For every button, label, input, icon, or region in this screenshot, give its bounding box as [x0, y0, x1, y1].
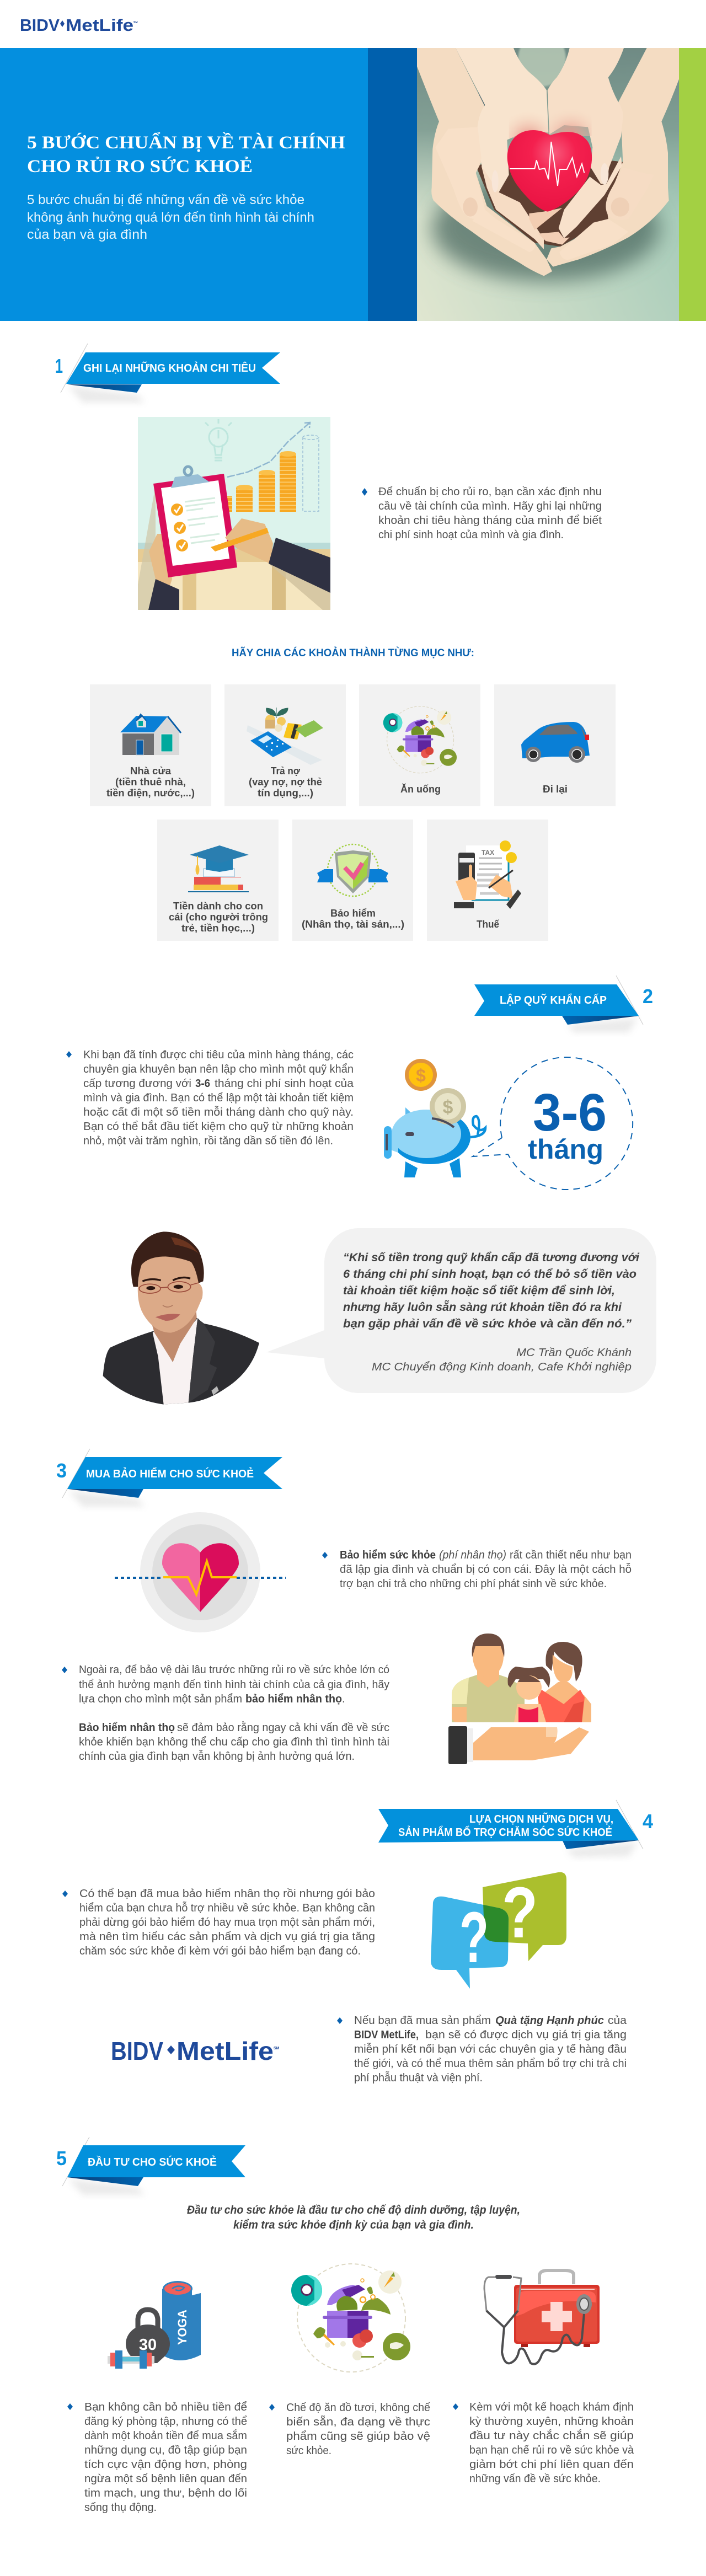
logo: BIDV MetLife large: SM — [274, 2047, 280, 2050]
text block: gym advice: những dụng cụ, đồ tập giúp bạn — [84, 2444, 247, 2456]
text block: step 1 description: khoản chi tiêu hàng tháng của mình để biết — [378, 515, 602, 527]
text block: life insurance: sẽ đảm bảo rằng ngay cả khi vấn đề về sức — [177, 1721, 389, 1734]
text block: step 5 intro — [187, 2204, 520, 2231]
text block: step 1 description: chi phí sinh hoạt của mình và gia đình. — [378, 529, 564, 541]
icon: yoga mat, kettlebell and dumbbell: 30 — [139, 2336, 157, 2354]
icon: shield — [317, 844, 388, 896]
panel: card debt: Trả nợ — [271, 765, 300, 776]
panel: card children — [157, 820, 279, 941]
callout: quote bubble: MC Chuyển động Kinh doanh, Cafe Khởi nghiệp — [372, 1361, 632, 1373]
callout: 3-6 months dashed bubble — [473, 1057, 633, 1190]
image: portrait of MC Trần Quốc Khánh — [103, 1231, 259, 1405]
panel: card transport: Đi lại — [543, 784, 568, 795]
callout: quote bubble: “Khi số tiền trong quỹ khẩn cấp đã tương đương với — [343, 1251, 640, 1264]
heading: hero title: CHO RỦI RO SỨC KHOẺ — [27, 156, 253, 176]
text block: step 4 second paragraph: bạn sẽ có được dịch vụ giá trị gia tăng — [425, 2029, 627, 2041]
illustration: clipboard and coin stacks — [138, 417, 330, 610]
icon: yoga mat, kettlebell and dumbbell: YOGA — [175, 2310, 189, 2345]
panel: card children: Tiền dành cho con — [173, 901, 263, 912]
panel: hero banner — [0, 31, 706, 321]
text block: diet advice: sức khỏe. — [286, 2445, 331, 2457]
text block: check-up advice: những vấn đề về sức khỏe. — [469, 2473, 601, 2485]
text block: life insurance: Bảo hiểm nhân thọ — [79, 1722, 175, 1734]
text block: diet advice: biến sẵn, đa dạng về thực — [286, 2416, 430, 2428]
panel: card insurance: Bảo hiểm — [330, 908, 376, 919]
text block: diet advice: phẩm cũng sẽ giúp bảo vệ — [286, 2430, 430, 2443]
text block: health insurance: rất cần thiết nếu như bạn — [510, 1549, 632, 1561]
text block: life insurance: bảo hiểm nhân thọ — [245, 1693, 342, 1705]
text block: gym advice: sống thụ động. — [84, 2502, 157, 2514]
logo: BIDV MetLife header: SM — [133, 21, 138, 24]
panel: card tax — [427, 820, 548, 941]
text block: step 2 description — [66, 1049, 354, 1147]
heading: step 5 ribbon: 5 — [56, 2147, 67, 2170]
panel: card insurance: (Nhân thọ, tài sản,...) — [302, 919, 404, 930]
text block: step 4 second paragraph: của — [608, 2015, 627, 2027]
callout: quote bubble: nhưng hãy luôn sẵn sàng rút khoản tiền đó ra khi — [343, 1300, 622, 1314]
text block: step 4 second paragraph: BIDV MetLife, — [354, 2029, 419, 2041]
callout: quote bubble: tài khoản tiết kiệm hoặc sổ tiết kiệm để sinh lời, — [343, 1284, 615, 1297]
panel: card insurance — [292, 820, 413, 941]
text block: step 2 description: tháng chi phí sinh hoạt của — [215, 1078, 354, 1090]
text block: life insurance — [62, 1664, 389, 1763]
heading: step 3 ribbon: 3 — [56, 1459, 67, 1482]
heading: step 2 ribbon — [474, 976, 653, 1032]
heading: step 4 ribbon: LỰA CHỌN NHỮNG DỊCH VỤ, — [469, 1812, 613, 1825]
heading: step 1 ribbon: 1 — [55, 355, 63, 377]
text block: step 2 description: hoặc cất đi một số tiền mỗi tháng dành cho quỹ này. — [83, 1106, 354, 1118]
panel: card debt: (vay nợ, nợ thẻ — [249, 776, 322, 788]
heading: step 3 ribbon — [56, 1449, 282, 1507]
heading: step 2 ribbon: 2 — [643, 985, 653, 1008]
text block: health insurance: Bảo hiểm sức khỏe — [340, 1549, 436, 1561]
icon: piggy bank with coins: $ — [443, 1097, 453, 1118]
heading: hero title — [27, 131, 345, 176]
text block: step 2 description: mình và gia đình. Bạn có thể lập một tài khoản tiết kiệm — [83, 1092, 354, 1104]
text block: step 1 description: cầu về tài chính của mình. Hãy ghi lại những — [378, 500, 602, 512]
text block: health insurance: (phí nhân thọ) — [439, 1549, 506, 1561]
text block: check-up advice: đầu tư này chắc chắn sẽ giúp — [469, 2429, 634, 2442]
text block: check-up advice: bạn hạn chế rủi ro về sức khỏe và — [469, 2444, 634, 2456]
icon: house — [120, 714, 181, 755]
icon: graduation cap and books — [188, 845, 249, 892]
text block: hero subtitle: 5 bước chuẩn bị để những vấn đề về sức khỏe — [27, 192, 304, 207]
icon: tax form with calculator — [454, 840, 521, 909]
text block: check-up advice: giảm bớt chi phí liên quan đến — [469, 2459, 634, 2471]
text block: step 4 second paragraph: miễn phí kết nối bạn với các chuyên gia y tế hàng đầu — [354, 2043, 627, 2055]
text block: gym advice: tích cực vận động hơn, phòng — [84, 2459, 247, 2471]
panel: card housing: Nhà cửa — [130, 765, 172, 776]
image: hands holding a red heart — [417, 48, 679, 321]
icon: healthy food pot — [291, 2264, 410, 2372]
text block: step 2 description: nhỏ, một vài trăm nghìn, rồi tăng dần số tiền đó lên. — [83, 1135, 333, 1147]
icon: heart with heartbeat — [115, 1512, 286, 1632]
logo: BIDV MetLife large: MetLife — [176, 2037, 274, 2065]
icon: first aid kit with stethoscope — [484, 2270, 600, 2364]
panel: card tax: Thuế — [477, 919, 500, 930]
heading: step 1 ribbon — [55, 344, 280, 403]
logo: BIDV MetLife header: BIDV — [20, 15, 60, 35]
panel: card housing — [90, 684, 211, 806]
icon: piggy bank with coins — [384, 1059, 485, 1177]
logo: BIDV MetLife header: MetLife — [66, 15, 133, 35]
heading: step 3 ribbon: MUA BẢO HIỂM CHO SỨC KHOẺ — [86, 1467, 254, 1480]
panel: card food: Ăn uống — [400, 783, 441, 795]
text block: health insurance — [322, 1549, 632, 1590]
callout: quote bubble: MC Trần Quốc Khánh — [516, 1347, 632, 1359]
text block: life insurance: lựa chọn cho mình một sản phẩm — [79, 1693, 242, 1705]
text block: hero subtitle: của bạn và gia đình — [27, 227, 147, 242]
text block: hero subtitle — [27, 192, 314, 242]
text block: check-up advice: kỳ thường xuyên, những khoản — [469, 2416, 634, 2428]
heading: hero title: 5 BƯỚC CHUẨN BỊ VỀ TÀI CHÍNH — [27, 131, 345, 153]
text block: step 2 description: Khi bạn đã tính được chi tiêu của mình hàng tháng, các — [83, 1049, 354, 1061]
icon: blue car — [521, 722, 590, 763]
logo: BIDV MetLife large — [111, 2037, 280, 2065]
text block: health insurance: đã lập gia đình và chuẩn bị có con cái. Đây là một cách hỗ — [340, 1563, 632, 1576]
icon: family on an open hand — [448, 1634, 591, 1764]
heading: step 1 ribbon: GHI LẠI NHỮNG KHOẢN CHI TIÊU — [83, 361, 256, 374]
text block: diet advice — [269, 2402, 430, 2457]
panel: card debt — [224, 684, 346, 806]
icon: tax form with calculator: TAX — [482, 849, 494, 856]
text block: gym advice: Bạn không cần bỏ nhiều tiền để — [84, 2401, 247, 2413]
panel: card children: trẻ, tiền học,...) — [181, 923, 255, 934]
text block: check-up advice: Kèm với một kế hoạch khám định — [469, 2401, 634, 2413]
panel: card debt: tín dụng,...) — [258, 788, 313, 799]
text block: step 4 second paragraph — [337, 2015, 627, 2084]
icon: yoga mat, kettlebell and dumbbell — [108, 2281, 201, 2369]
text block: life insurance: khỏe khiến bạn không thể chu cấp cho gia đình thì tình hình tài — [79, 1736, 389, 1748]
text block: step 5 intro: Đầu tư cho sức khỏe là đầu tư cho chế độ dinh dưỡng, tập luyện, — [187, 2204, 520, 2216]
text block: life insurance: . — [342, 1693, 345, 1705]
text block: hero subtitle: không ảnh hưởng quá lớn đến tình hình tài chính — [27, 210, 314, 225]
text block: life insurance: chính của gia đình bạn vẫn không bị ảnh hưởng quá lớn. — [79, 1750, 355, 1763]
text block: step 4 first paragraph: Có thể bạn đã mua bảo hiểm nhân thọ rồi nhưng gói bảo — [79, 1888, 375, 1900]
heading: step 4 ribbon — [378, 1800, 653, 1857]
text block: diet advice: Chế độ ăn đồ tươi, không chế — [286, 2402, 430, 2414]
text block: step 2 description: cấp tương đương với — [83, 1078, 191, 1090]
text block: step 2 description: 3-6 — [195, 1078, 210, 1090]
text block: step 4 second paragraph: thế giới, và có thể mua thêm sản phẩm bổ trợ chi trả chi — [354, 2058, 627, 2070]
text block: gym advice: ngừa một số bệnh liên quan đến — [84, 2473, 247, 2485]
logo: BIDV MetLife large: BIDV — [111, 2037, 163, 2065]
icon: calculator and credit cards — [247, 708, 323, 765]
callout: quote bubble — [266, 1228, 656, 1393]
heading: step 4 ribbon: SẢN PHẨM BỔ TRỢ CHĂM SÓC SỨC KHOẺ — [398, 1825, 612, 1839]
text block: step 2 description: chuyên gia khuyên bạn nên lập cho mình một quỹ khẩn — [83, 1063, 354, 1075]
panel: card housing: tiền điện, nước,...) — [106, 788, 195, 799]
text block: step 4 second paragraph: Quà tặng Hạnh phúc — [495, 2015, 604, 2027]
panel: card housing: (tiền thuê nhà, — [115, 776, 186, 788]
text block: check-up advice — [453, 2401, 634, 2485]
text block: step 4 first paragraph: chăm sóc sức khỏe đi kèm với gói bảo hiểm bạn đang có. — [79, 1945, 361, 1957]
heading: categories: HÃY CHIA CÁC KHOẢN THÀNH TỪNG MỤC NHƯ: — [232, 647, 474, 659]
text block: step 4 second paragraph: phí phẫu thuật và viện phí. — [354, 2071, 483, 2084]
text block: gym advice: dành một khoản tiền để mua sắm — [84, 2429, 247, 2442]
icon: question speech bubbles — [431, 1872, 566, 1989]
text block: gym advice — [67, 2401, 247, 2514]
callout: 3-6 months dashed bubble: tháng — [528, 1134, 603, 1165]
text block: step 1 description — [362, 486, 602, 541]
text block: step 2 description: Bạn có thể bắt đầu tiết kiệm cho quỹ từ những khoản — [83, 1120, 354, 1133]
callout: quote bubble: 6 tháng chi phí sinh hoạt, bạn có thể bỏ số tiền vào — [343, 1268, 637, 1281]
text block: step 4 first paragraph: mà nên tìm hiểu các sản phẩm và dịch vụ giá trị gia tăng — [79, 1931, 375, 1943]
heading: step 4 ribbon: 4 — [643, 1810, 653, 1833]
callout: quote bubble: bạn gặp phải vấn đề về sức khỏe và cần đến nó.” — [343, 1318, 632, 1330]
text block: step 4 second paragraph: Nếu bạn đã mua sản phẩm — [354, 2015, 491, 2027]
text block: step 4 first paragraph: phải dừng gói bảo hiểm đó hay mua trọn một sản phẩm mới, — [79, 1916, 375, 1929]
icon: piggy bank with coins: $ — [416, 1065, 426, 1085]
icon: food pot — [383, 706, 457, 773]
text block: step 5 intro: kiểm tra sức khỏe định kỳ của bạn và gia đình. — [233, 2219, 474, 2231]
text block: life insurance: thể ảnh hưởng mạnh đến tình hình tài chính của cả gia đình, hãy — [79, 1679, 389, 1691]
panel: card transport — [494, 684, 616, 806]
callout: 3-6 months dashed bubble: 3-6 — [533, 1083, 607, 1142]
icon: light bulb — [205, 419, 232, 460]
text block: life insurance: Ngoài ra, để bảo vệ dài lâu trước những rủi ro về sức khỏe lớn có — [79, 1664, 389, 1676]
heading: step 2 ribbon: LẬP QUỸ KHẨN CẤP — [500, 993, 607, 1006]
text block: health insurance: trợ bạn chi trả cho những chi phí phát sinh về sức khỏe. — [340, 1578, 607, 1590]
logo: BIDV MetLife header — [20, 15, 138, 35]
text block: step 4 first paragraph: hiểm của bạn chưa hỗ trợ nhiều về sức khỏe. Bạn không cần — [79, 1902, 375, 1914]
text block: gym advice: tim mạch, ung thư, bệnh do lối — [84, 2487, 247, 2499]
heading: step 5 ribbon — [56, 2137, 245, 2195]
text block: step 1 description: Để chuẩn bị cho rủi ro, bạn cần xác định nhu — [378, 486, 602, 498]
icon: question speech bubbles: ? — [502, 1872, 538, 1953]
heading: step 5 ribbon: ĐẦU TƯ CHO SỨC KHOẺ — [88, 2155, 217, 2168]
text block: gym advice: đăng ký phòng tập, nhưng có thể — [84, 2416, 247, 2428]
icon: question speech bubbles: ? — [459, 1897, 489, 1978]
panel: card children: cái (cho người trông — [169, 912, 268, 923]
panel: card food — [359, 684, 480, 806]
text block: step 4 first paragraph — [62, 1888, 375, 1957]
